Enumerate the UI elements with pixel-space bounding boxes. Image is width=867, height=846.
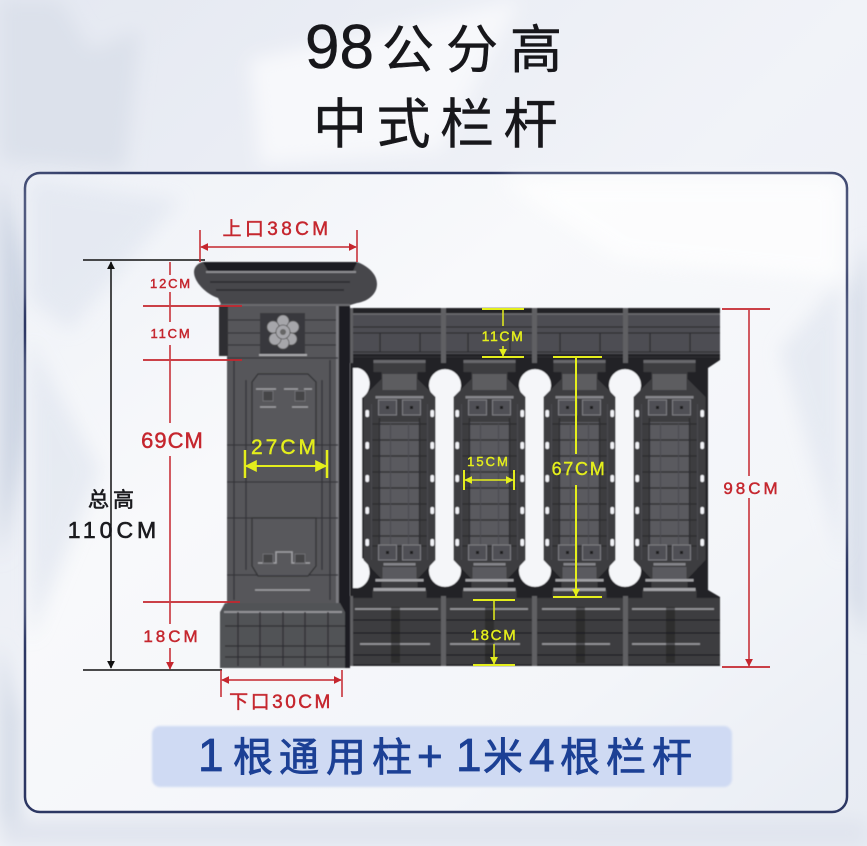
black dimension: total height: 110CM [68,517,160,543]
banner: composition note: 根通用柱 [233,736,412,780]
black dimension: total height: 总高 [88,489,138,512]
red dimension: railing height: 98CM [723,479,781,498]
railing body [350,308,720,666]
title: 中式栏杆 [313,95,567,155]
red dimension: railing height [722,309,781,667]
yellow dimension: column width [245,436,327,478]
black dimension: total height [68,260,222,670]
banner: composition note: 1 [456,729,482,781]
red dimension: top width [200,218,357,262]
banner: composition note: 1 [198,729,224,781]
red dimension: top width: 上口38CM [222,218,332,240]
red dimensions: column heights: 11CM [151,326,191,341]
banner: composition note: 4 [529,729,555,781]
title: 公分高 [382,22,574,80]
panel: product dimensions [25,173,847,812]
yellow dimension: top rail height [482,309,524,357]
column [194,262,377,668]
yellow dimension: baluster width: 15CM [467,454,510,469]
yellow dimension: baluster height: 67CM [552,459,606,479]
banner: composition note: 根栏杆 [560,736,692,780]
carved panel upper [252,374,316,445]
banner: composition note: 米 [483,736,523,780]
red dimensions: column heights: 69CM [141,428,204,453]
column shaft [227,304,339,604]
yellow dimension: baluster width [464,454,514,490]
railing section [348,308,720,666]
bottom rail [348,596,720,666]
red dimensions: column heights: 18CM [143,627,201,646]
red dimension: bottom width [221,670,342,713]
openings between balusters [353,368,641,588]
red dimensions: column heights: 12CM [150,276,192,291]
rosette ornament [259,313,307,355]
banner: composition note: + [417,732,443,781]
yellow dimension: bottom rail height [471,600,517,665]
red dimension: bottom width: 下口30CM [229,692,333,713]
top beam [348,308,720,363]
title [305,13,574,155]
title: 98 [305,13,374,82]
yellow dimension: top rail height: 11CM [482,328,524,344]
yellow dimension: column width: 27CM [251,436,319,459]
carved panel lower [252,518,316,576]
column cap [194,262,377,306]
yellow dimension: baluster height [552,357,606,597]
column base [220,603,345,668]
banner: composition note [152,726,732,787]
yellow dimension: bottom rail height: 18CM [471,627,517,644]
balusters [364,360,706,598]
red dimensions: column heights [141,262,242,669]
